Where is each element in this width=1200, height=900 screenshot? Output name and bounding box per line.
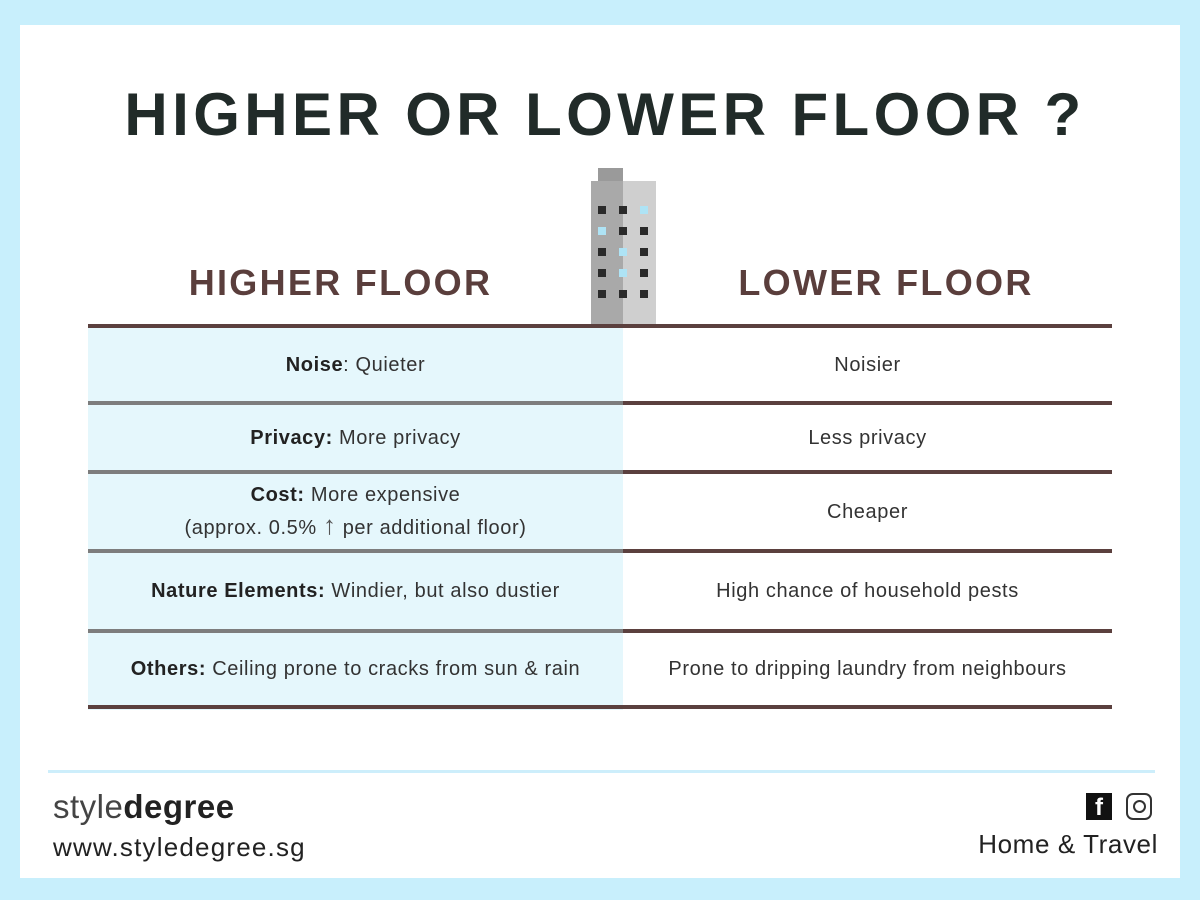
icons: social: f <box>1095 794 1103 821</box>
row: privacy: Privacy: More privacy <box>250 426 461 448</box>
heading: lower floor: LOWER FLOOR <box>738 262 1034 303</box>
table: Less privacy <box>808 426 927 448</box>
row: noise: Noise: Quieter <box>286 354 425 376</box>
footer tagline: Home & Travel <box>978 829 1158 859</box>
icon: building <box>591 168 656 324</box>
row: cost: Cost: More expensive <box>251 484 460 506</box>
row: nature: Nature Elements: Windier, but also dustier <box>151 580 560 602</box>
table: High chance of household pests <box>716 580 1019 602</box>
row: others: Others: Ceiling prone to cracks from sun & rain <box>131 658 580 680</box>
row: cost: (approx. 0.5% ↑ per additional floor) <box>184 510 527 540</box>
row: cost <box>184 484 527 540</box>
table: Cheaper <box>827 500 908 522</box>
table: Prone to dripping laundry from neighbours <box>668 658 1067 680</box>
table: Noisier <box>834 354 901 376</box>
footer brand: styledegree <box>53 788 235 825</box>
title: HIGHER OR LOWER FLOOR ? <box>124 81 1086 148</box>
heading: higher floor: HIGHER FLOOR <box>189 262 492 303</box>
icons: social <box>1086 793 1152 821</box>
table <box>88 324 1112 710</box>
footer url: www.styledegree.sg <box>53 832 306 862</box>
